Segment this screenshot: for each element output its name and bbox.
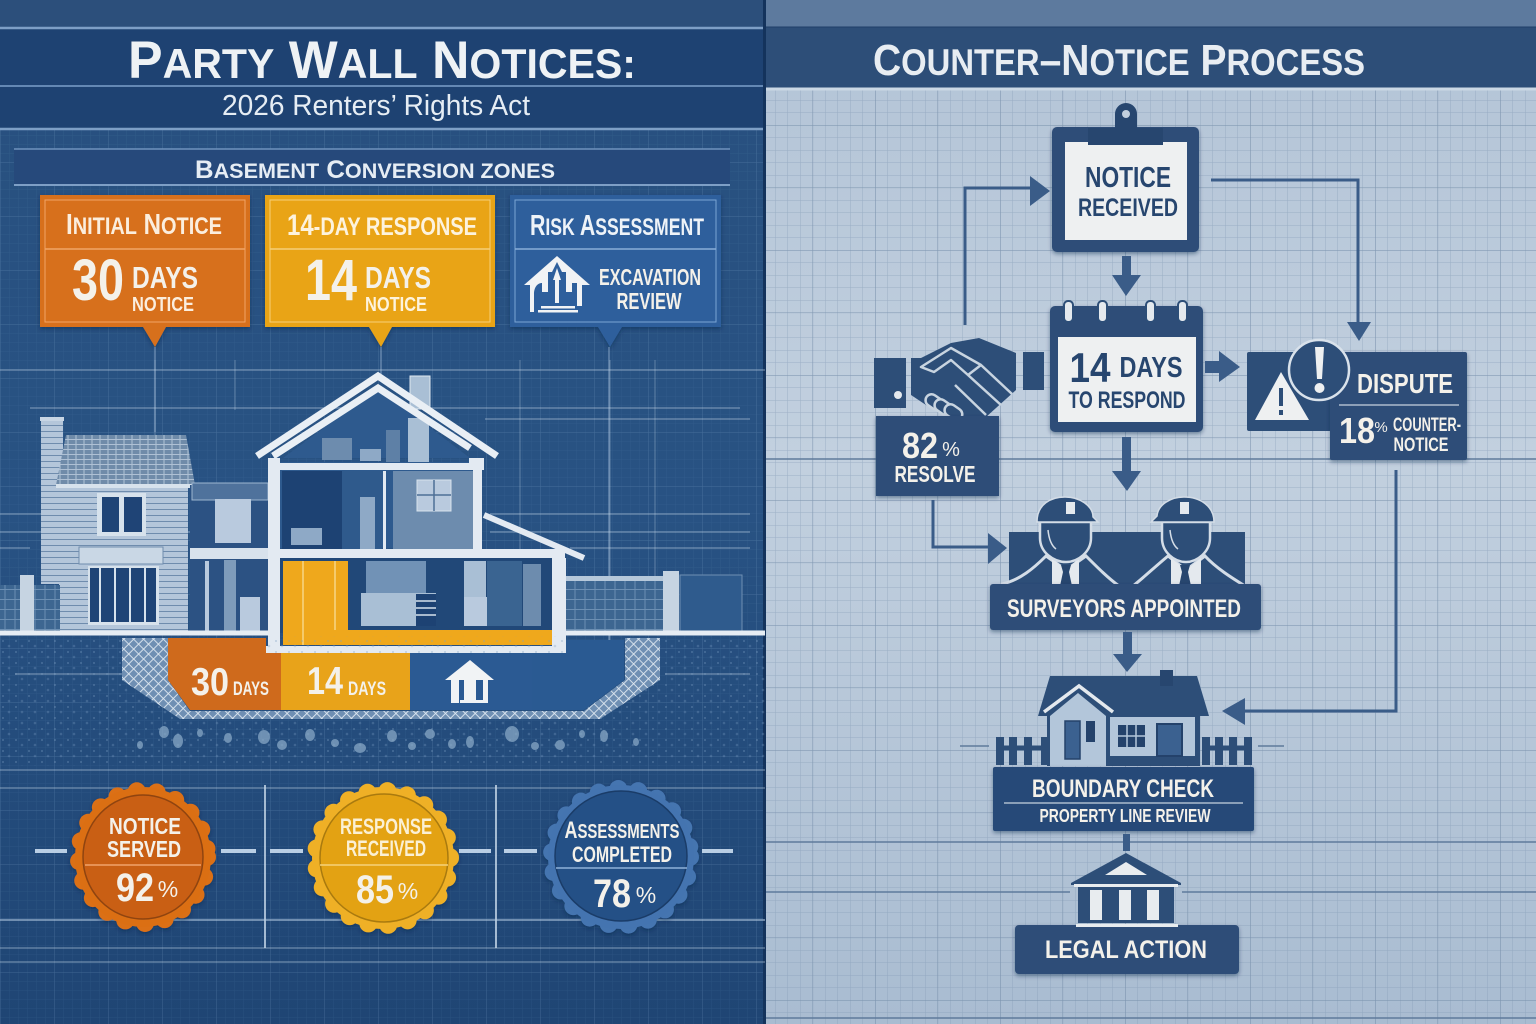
- icon: surveyor right: [1133, 497, 1245, 586]
- right garden wall: [566, 571, 742, 633]
- step: boundary check: BOUNDARY CHECK: [1032, 775, 1214, 803]
- card: initial notice: [40, 195, 250, 347]
- walls and beams: [265, 458, 566, 653]
- arrow: loop from handshake to notice: [965, 176, 1050, 325]
- step: dispute: %: [1374, 419, 1388, 436]
- card: initial notice: DAYS: [132, 260, 198, 295]
- icon: house: [1038, 676, 1209, 716]
- heading: BASEMENT CONVERSION ZONES: [195, 156, 555, 184]
- icon: excavation house: [445, 660, 494, 703]
- icon: exclamation circle: [1289, 340, 1349, 400]
- ground line: [0, 630, 765, 636]
- badge: assessments completed: %: [636, 882, 656, 908]
- card: 14-day response: 14-DAY RESPONSE: [287, 209, 477, 242]
- card: initial notice: 30: [72, 248, 124, 313]
- background: blueprint left panel: [0, 0, 765, 1024]
- title: counter-notice: COUNTER–NOTICE PROCESS: [873, 36, 1365, 85]
- link extension: [190, 483, 268, 633]
- card: risk assessment: EXCAVATION: [599, 264, 701, 290]
- illustration: house cross-section with excavation: DAYS: [348, 679, 386, 700]
- stat: 82% resolve: [876, 416, 999, 496]
- main house interior: [280, 388, 473, 548]
- card: risk assessment: RISK ASSESSMENT: [530, 210, 704, 242]
- panel: right title band: [765, 0, 1536, 89]
- icon: house with up arrow: [524, 256, 590, 312]
- step: dispute: DISPUTE: [1357, 368, 1453, 399]
- step: surveyors appointed: [990, 497, 1261, 630]
- badge: notice served: [75, 787, 211, 927]
- card: 14-day response: NOTICE: [365, 294, 427, 316]
- card: 14-day response: [265, 195, 495, 347]
- neighbouring house: [40, 417, 195, 633]
- badge: response received: RESPONSE: [340, 814, 432, 839]
- chimney: [410, 376, 430, 409]
- card: initial notice: NOTICE: [132, 294, 194, 316]
- rubble: [137, 726, 639, 753]
- panel: basement conversion zones header: [14, 149, 730, 186]
- badge: notice served: SERVED: [107, 836, 181, 862]
- arrow: notice to calendar: [1112, 256, 1141, 296]
- background: graph paper right panel: [765, 0, 1536, 1024]
- step: 14 days calendar: TO RESPOND: [1068, 387, 1186, 414]
- left garden wall: [0, 575, 60, 633]
- excavation zones: [168, 638, 282, 710]
- icon: surveyor left: [1002, 497, 1119, 586]
- connector: boundary to legal: [1123, 834, 1130, 851]
- blueprint drawing lines: [0, 370, 765, 962]
- arrow: dispute to boundary check: [1222, 470, 1396, 725]
- badge: assessments completed: 78: [593, 872, 631, 916]
- arrow: resolve to surveyors: [933, 500, 1007, 564]
- step: legal action: [1015, 853, 1239, 974]
- step: notice received clipboard: [1052, 103, 1199, 252]
- badge: response received: [312, 787, 454, 929]
- badge: notice served: %: [158, 876, 178, 902]
- arrow: calendar to dispute: [1205, 351, 1240, 382]
- soil: [0, 636, 765, 766]
- illustration: house cross-section with excavation: DAYS: [233, 679, 269, 700]
- arrow: calendar to surveyors: [1112, 437, 1141, 491]
- icon: warning triangle: [1255, 372, 1309, 420]
- badge: response received: 85: [356, 868, 394, 912]
- stat: 82% resolve: RESOLVE: [894, 461, 976, 487]
- arrow: surveyors to boundary: [1113, 632, 1142, 672]
- leader lines from cards to house: [155, 347, 609, 640]
- icon: fence: [1000, 737, 1248, 765]
- badge: assessments completed: COMPLETED: [572, 842, 672, 867]
- step: 14 days calendar: 14: [1070, 344, 1111, 391]
- stat: 82% resolve: 82: [902, 425, 938, 466]
- step: dispute: [1247, 340, 1467, 460]
- stat: 82% resolve: %: [942, 439, 960, 461]
- excavation shell: [122, 638, 660, 719]
- step: notice received clipboard: RECEIVED: [1078, 194, 1178, 222]
- step: 14 days calendar: DAYS: [1120, 352, 1182, 384]
- step: 14 days calendar: [1050, 301, 1203, 432]
- badge: notice served: NOTICE: [109, 813, 181, 839]
- label: 30 days: 30: [191, 661, 229, 704]
- badge: assessments completed: ASSESSMENTS: [564, 817, 680, 844]
- step: boundary check: PROPERTY LINE REVIEW: [1040, 806, 1211, 826]
- step: dispute: 18: [1339, 410, 1375, 451]
- yellow basement zone: [283, 561, 552, 645]
- badge: response received: %: [398, 878, 418, 904]
- icon: handshake: [874, 338, 1044, 423]
- step: dispute: NOTICE: [1394, 435, 1448, 456]
- label: 14 days: 14: [307, 660, 343, 703]
- card: 14-day response: DAYS: [365, 260, 431, 295]
- ground floor room: [280, 558, 552, 633]
- divider between panels: [763, 0, 766, 1024]
- card: risk assessment: REVIEW: [616, 288, 682, 314]
- porch roof: [484, 515, 584, 558]
- subtitle: 2026 Renters’ Rights Act: [222, 90, 530, 122]
- badge: notice served: 92: [116, 866, 154, 910]
- icon: courthouse: [1071, 853, 1181, 923]
- roof: [257, 376, 497, 456]
- card: 14-day response: 14: [305, 248, 357, 313]
- step: surveyors appointed: SURVEYORS APPOINTED: [1007, 595, 1241, 623]
- illustration: house cross-section with excavation: [0, 376, 765, 766]
- badge: assessments completed: [548, 785, 694, 929]
- arrow: notice to dispute: [1211, 180, 1371, 341]
- step: boundary check: [993, 670, 1254, 831]
- card: initial notice: INITIAL NOTICE: [66, 209, 222, 241]
- panel: left title band: [0, 0, 765, 129]
- badge: response received: RECEIVED: [346, 836, 426, 861]
- step: notice received clipboard: NOTICE: [1085, 162, 1171, 194]
- badge row frame: [265, 785, 496, 948]
- step: legal action: LEGAL ACTION: [1045, 936, 1207, 964]
- step: dispute: COUNTER-: [1393, 415, 1461, 436]
- title: PARTY WALL NOTICES:: [128, 31, 636, 90]
- card: risk assessment: [510, 195, 721, 347]
